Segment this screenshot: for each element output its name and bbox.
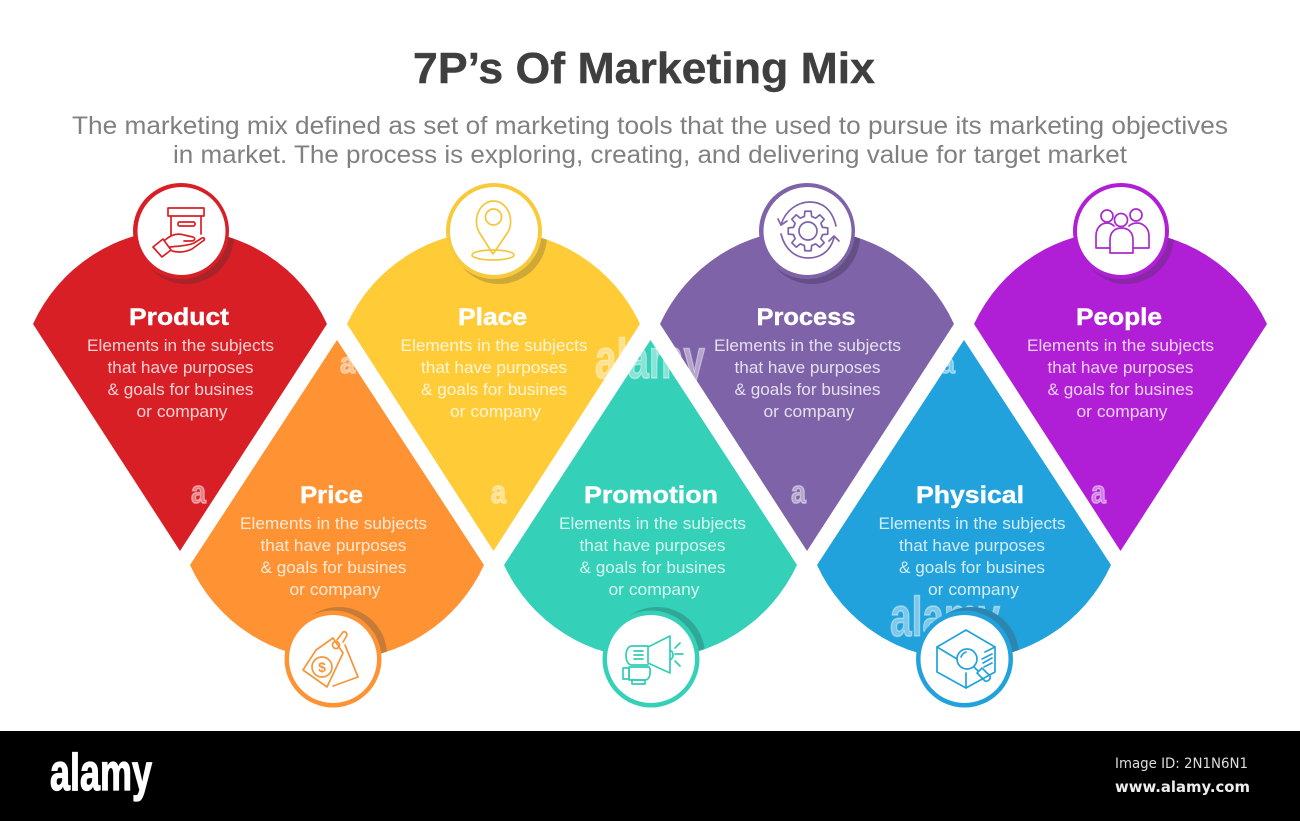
text: promotion [559, 514, 746, 599]
footer image id: Image ID: 2N1N6N1 [1115, 756, 1248, 772]
text: price [240, 514, 427, 599]
text: product: or company [136, 402, 228, 421]
text: product [87, 336, 274, 421]
heading: physical: Physical [916, 482, 1024, 509]
text: process: & goals for busines [734, 380, 880, 399]
footer bar [0, 731, 1300, 821]
text: process [714, 336, 901, 421]
text: physical: or company [928, 580, 1020, 599]
panel: process [660, 183, 954, 551]
text: people: that have purposes [1048, 358, 1194, 377]
text: product: Elements in the subjects [87, 336, 274, 355]
text: price: or company [290, 580, 381, 599]
text: promotion: that have purposes [580, 536, 726, 555]
footer logo: alamy [50, 744, 152, 802]
subtitle [72, 112, 1228, 169]
watermarks [191, 327, 1106, 510]
icon: price tags [303, 632, 358, 687]
text: process: or company [764, 402, 855, 421]
text: people [1027, 336, 1214, 421]
icon: hand holding box [153, 208, 204, 257]
text: place: & goals for busines [421, 380, 567, 399]
text: place: Elements in the subjects [400, 336, 588, 355]
heading: process: Process [756, 304, 856, 331]
text: promotion: or company [608, 580, 700, 599]
text: people: Elements in the subjects [1027, 336, 1214, 355]
watermark: physical: alamy [890, 585, 1000, 648]
icon: megaphone [623, 636, 683, 684]
subtitle: The marketing mix defined as set of marketing tools that the used to pursue its marketing objectives [72, 112, 1228, 140]
heading: price: Price [300, 482, 363, 509]
text: physical: & goals for busines [899, 558, 1045, 577]
panel: product [33, 183, 327, 551]
panel: price [190, 340, 484, 708]
text: promotion: Elements in the subjects [559, 514, 746, 533]
text: place: or company [450, 402, 542, 421]
text: physical [878, 514, 1066, 599]
text: promotion: & goals for busines [580, 558, 726, 577]
heading: product: Product [129, 304, 229, 331]
watermarks: a [940, 348, 955, 379]
panel: promotion [504, 340, 797, 708]
heading: people: People [1076, 304, 1162, 331]
watermarks: a [191, 474, 206, 510]
watermarks: a [1091, 474, 1106, 510]
watermarks: a [791, 474, 806, 510]
subtitle: in market. The process is exploring, creating, and delivering value for target market [173, 141, 1127, 169]
heading: promotion: Promotion [584, 482, 718, 509]
text: process: that have purposes [734, 358, 880, 377]
icon: price tags: $ [318, 659, 326, 675]
icon: people group [1096, 209, 1149, 253]
icon: location pin [472, 201, 514, 260]
text: place: that have purposes [421, 358, 567, 377]
panel: physical [817, 340, 1111, 708]
watermarks: a [491, 474, 506, 510]
watermarks: alamy [595, 327, 705, 390]
text: physical: that have purposes [899, 536, 1045, 555]
text: price: that have purposes [260, 536, 406, 555]
panel: people [974, 183, 1267, 551]
icon: gear cycle [778, 202, 839, 258]
text: price: & goals for busines [260, 558, 406, 577]
text: people: & goals for busines [1048, 380, 1194, 399]
text: price: Elements in the subjects [240, 514, 427, 533]
panel: place [347, 183, 640, 551]
text: place [400, 336, 588, 421]
footer url: www.alamy.com [1115, 778, 1250, 796]
text: product: that have purposes [108, 358, 254, 377]
text: physical: Elements in the subjects [878, 514, 1066, 533]
text: product: & goals for busines [108, 380, 254, 399]
title: 7P’s Of Marketing Mix [413, 44, 876, 93]
heading: place: Place [458, 304, 527, 331]
text: process: Elements in the subjects [714, 336, 901, 355]
icon: box with magnifier [937, 630, 995, 688]
watermarks: a [340, 347, 355, 380]
text: people: or company [1076, 402, 1168, 421]
